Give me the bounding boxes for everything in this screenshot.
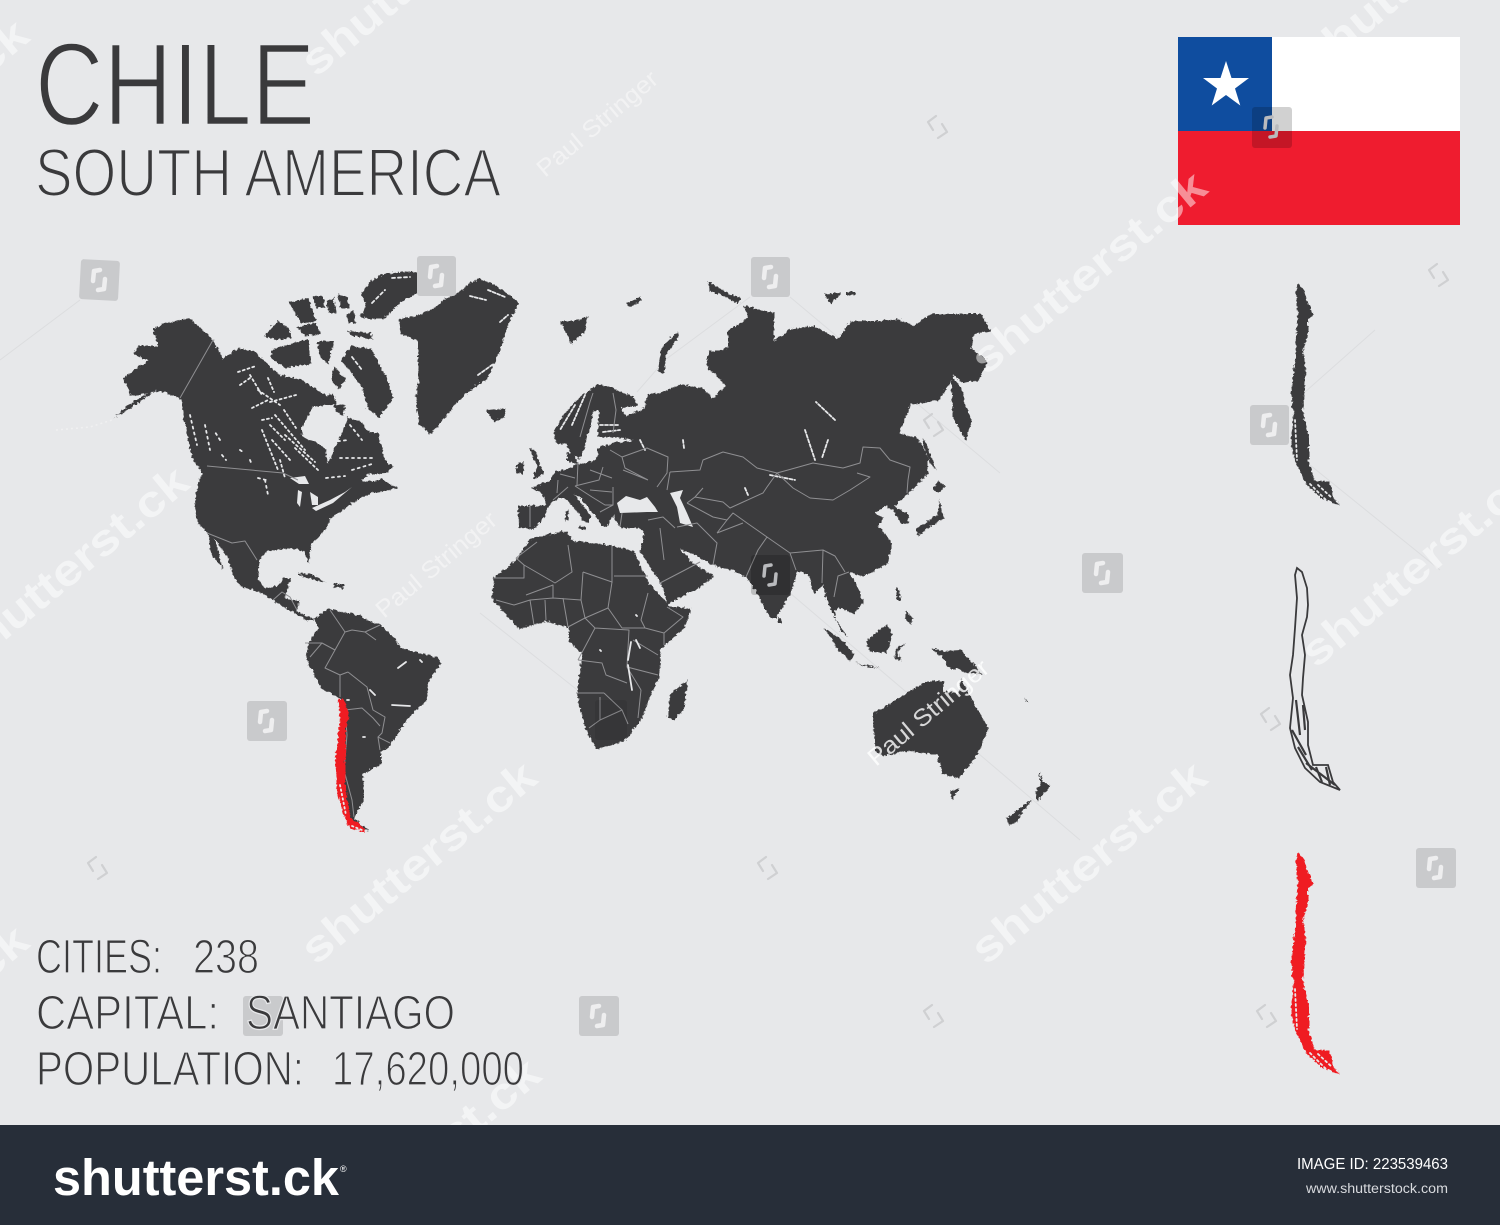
facts: population [36, 1043, 524, 1096]
Chile silhouette: outline [1290, 568, 1340, 790]
Chile silhouette: red [1290, 852, 1340, 1074]
Eurasia [517, 305, 990, 637]
Greenland [398, 278, 518, 433]
South America [305, 608, 440, 832]
facts: population: POPULATION: [36, 1043, 304, 1096]
Africa [491, 530, 690, 748]
watermarks: photographer name [371, 65, 995, 772]
Black Sea and Caspian Sea [617, 490, 693, 527]
Islands of Asia, Europe and Oceania [485, 280, 1049, 825]
watermark icons: filled squares [79, 107, 1456, 1036]
facts: capital [36, 987, 455, 1040]
watermarks: shutterstock: shutterst.ck [961, 751, 1217, 974]
facts: cities: CITIES: [36, 931, 162, 984]
watermarks: photographer name: Paul Stringer [532, 65, 664, 183]
Great Lakes [290, 476, 352, 511]
North America [56, 270, 518, 620]
subtitle: continent: SOUTH AMERICA [35, 135, 502, 211]
Chile highlighted in red [334, 698, 365, 832]
world map [56, 270, 1049, 832]
facts: cities: 238 [193, 931, 259, 984]
title: CHILE [35, 19, 315, 151]
website: www.shutterstock.com [1305, 1181, 1448, 1196]
facts: population: 17,620,000 [332, 1043, 524, 1096]
watermarks: photographer name: Paul Stringer [371, 506, 503, 624]
Alaska and US/Canada/Mexico borders [180, 340, 298, 610]
footer bar [0, 1125, 1500, 1225]
flag of Chile [1178, 37, 1460, 225]
facts: capital: CAPITAL: [36, 987, 219, 1040]
Kamchatka [950, 373, 970, 440]
watermarks: shutterstock: shutterst.ck [961, 161, 1217, 384]
facts: capital: SANTIAGO [246, 987, 455, 1040]
watermarks: photographer name: Paul Stringer [863, 654, 995, 772]
Chile silhouette: solid dark [1290, 283, 1340, 505]
image id: IMAGE ID: 223539463 [1297, 1156, 1448, 1173]
footer logo: shutterst.ck [53, 1149, 340, 1206]
registered mark: ® [340, 1164, 347, 1174]
watermark icons: small outlines [88, 116, 1448, 1027]
watermarks: shutterstock: shutterst.ck [291, 751, 547, 974]
